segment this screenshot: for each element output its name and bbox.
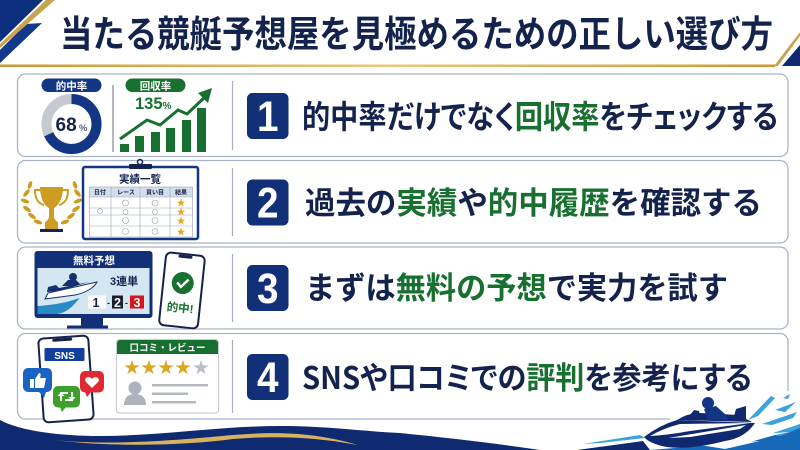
heading 3: まずは無料の予想で実力を試す: [305, 263, 728, 308]
results clipboard: ★: [176, 216, 186, 226]
donut chart 68%: %: [79, 123, 88, 134]
donut chart 68%: [46, 99, 96, 149]
donut chart 68%: 68: [56, 115, 77, 136]
smartphone hit check: 的中!: [166, 300, 194, 316]
header corner: top-left navy and gold: [0, 0, 55, 63]
monitor with boat race forecast: 1: [93, 296, 100, 310]
hit rate label: [42, 78, 102, 92]
hit rate label: 的中率: [56, 80, 88, 92]
title gold rule: [0, 64, 775, 67]
monitor with boat race forecast: -: [107, 298, 110, 308]
results clipboard: ★: [176, 198, 186, 208]
driver: [702, 397, 714, 409]
number badge 3: [247, 264, 288, 312]
trophy with laurel: [20, 181, 83, 232]
panel 3: [18, 247, 788, 329]
number badge 1: 1: [257, 92, 279, 140]
review card: 口コミ・レビュー: [129, 342, 206, 354]
like bubble: [23, 368, 52, 398]
heart bubble: [80, 371, 104, 397]
recovery rate label: 回収率: [140, 80, 172, 92]
results clipboard: 日付: [94, 188, 106, 196]
monitor with boat race forecast: 2: [114, 296, 121, 310]
results clipboard: レース: [117, 190, 135, 196]
results clipboard: ★: [176, 227, 186, 237]
panel 1: [18, 74, 788, 156]
monitor with boat race forecast: [34, 251, 152, 328]
results clipboard: [83, 160, 198, 239]
results clipboard: ★: [176, 207, 186, 217]
monitor with boat race forecast: -: [125, 298, 128, 308]
results clipboard: 結果: [175, 188, 187, 196]
smartphone hit check: [159, 252, 205, 329]
number badge 1: [247, 92, 288, 140]
results clipboard: 買い目: [146, 190, 164, 196]
review card: ★: [141, 360, 157, 377]
header corner: top-right navy and gold: [774, 32, 800, 66]
monitor with boat race forecast: 無料予想: [73, 254, 115, 267]
review card: ★: [124, 360, 140, 377]
results clipboard: 実績一覧: [119, 172, 161, 186]
recovery rate label: [126, 78, 186, 92]
heading 4: SNSや口コミでの評判を参考にする: [302, 353, 752, 398]
monitor with boat race forecast: 3: [134, 296, 141, 310]
heading 1: 的中率だけでなく回収率をチェックする: [302, 92, 778, 138]
repost bubble: [53, 386, 80, 412]
review card: ★: [158, 360, 174, 377]
number badge 4: 4: [257, 353, 279, 401]
number badge 2: 2: [257, 179, 279, 227]
review card: ★: [193, 360, 209, 377]
monitor with boat race forecast: 3連単: [110, 274, 138, 288]
review card: [116, 340, 218, 413]
recovery value: 135%: [135, 95, 172, 113]
heading 2: 過去の実績や的中履歴を確認する: [305, 178, 762, 223]
smartphone with social icons: [23, 335, 104, 423]
review card: ★: [175, 360, 191, 377]
hull: [644, 420, 755, 448]
bar chart with arrow: [120, 88, 212, 152]
panel 4: [18, 334, 788, 423]
number badge 3: 3: [257, 264, 279, 312]
number badge 4: [247, 353, 288, 401]
panel 2: [18, 160, 788, 243]
smartphone with social icons: SNS: [54, 351, 75, 362]
speedboat with spray: [577, 394, 800, 450]
number badge 2: [247, 179, 288, 227]
footer wave: [0, 391, 800, 450]
